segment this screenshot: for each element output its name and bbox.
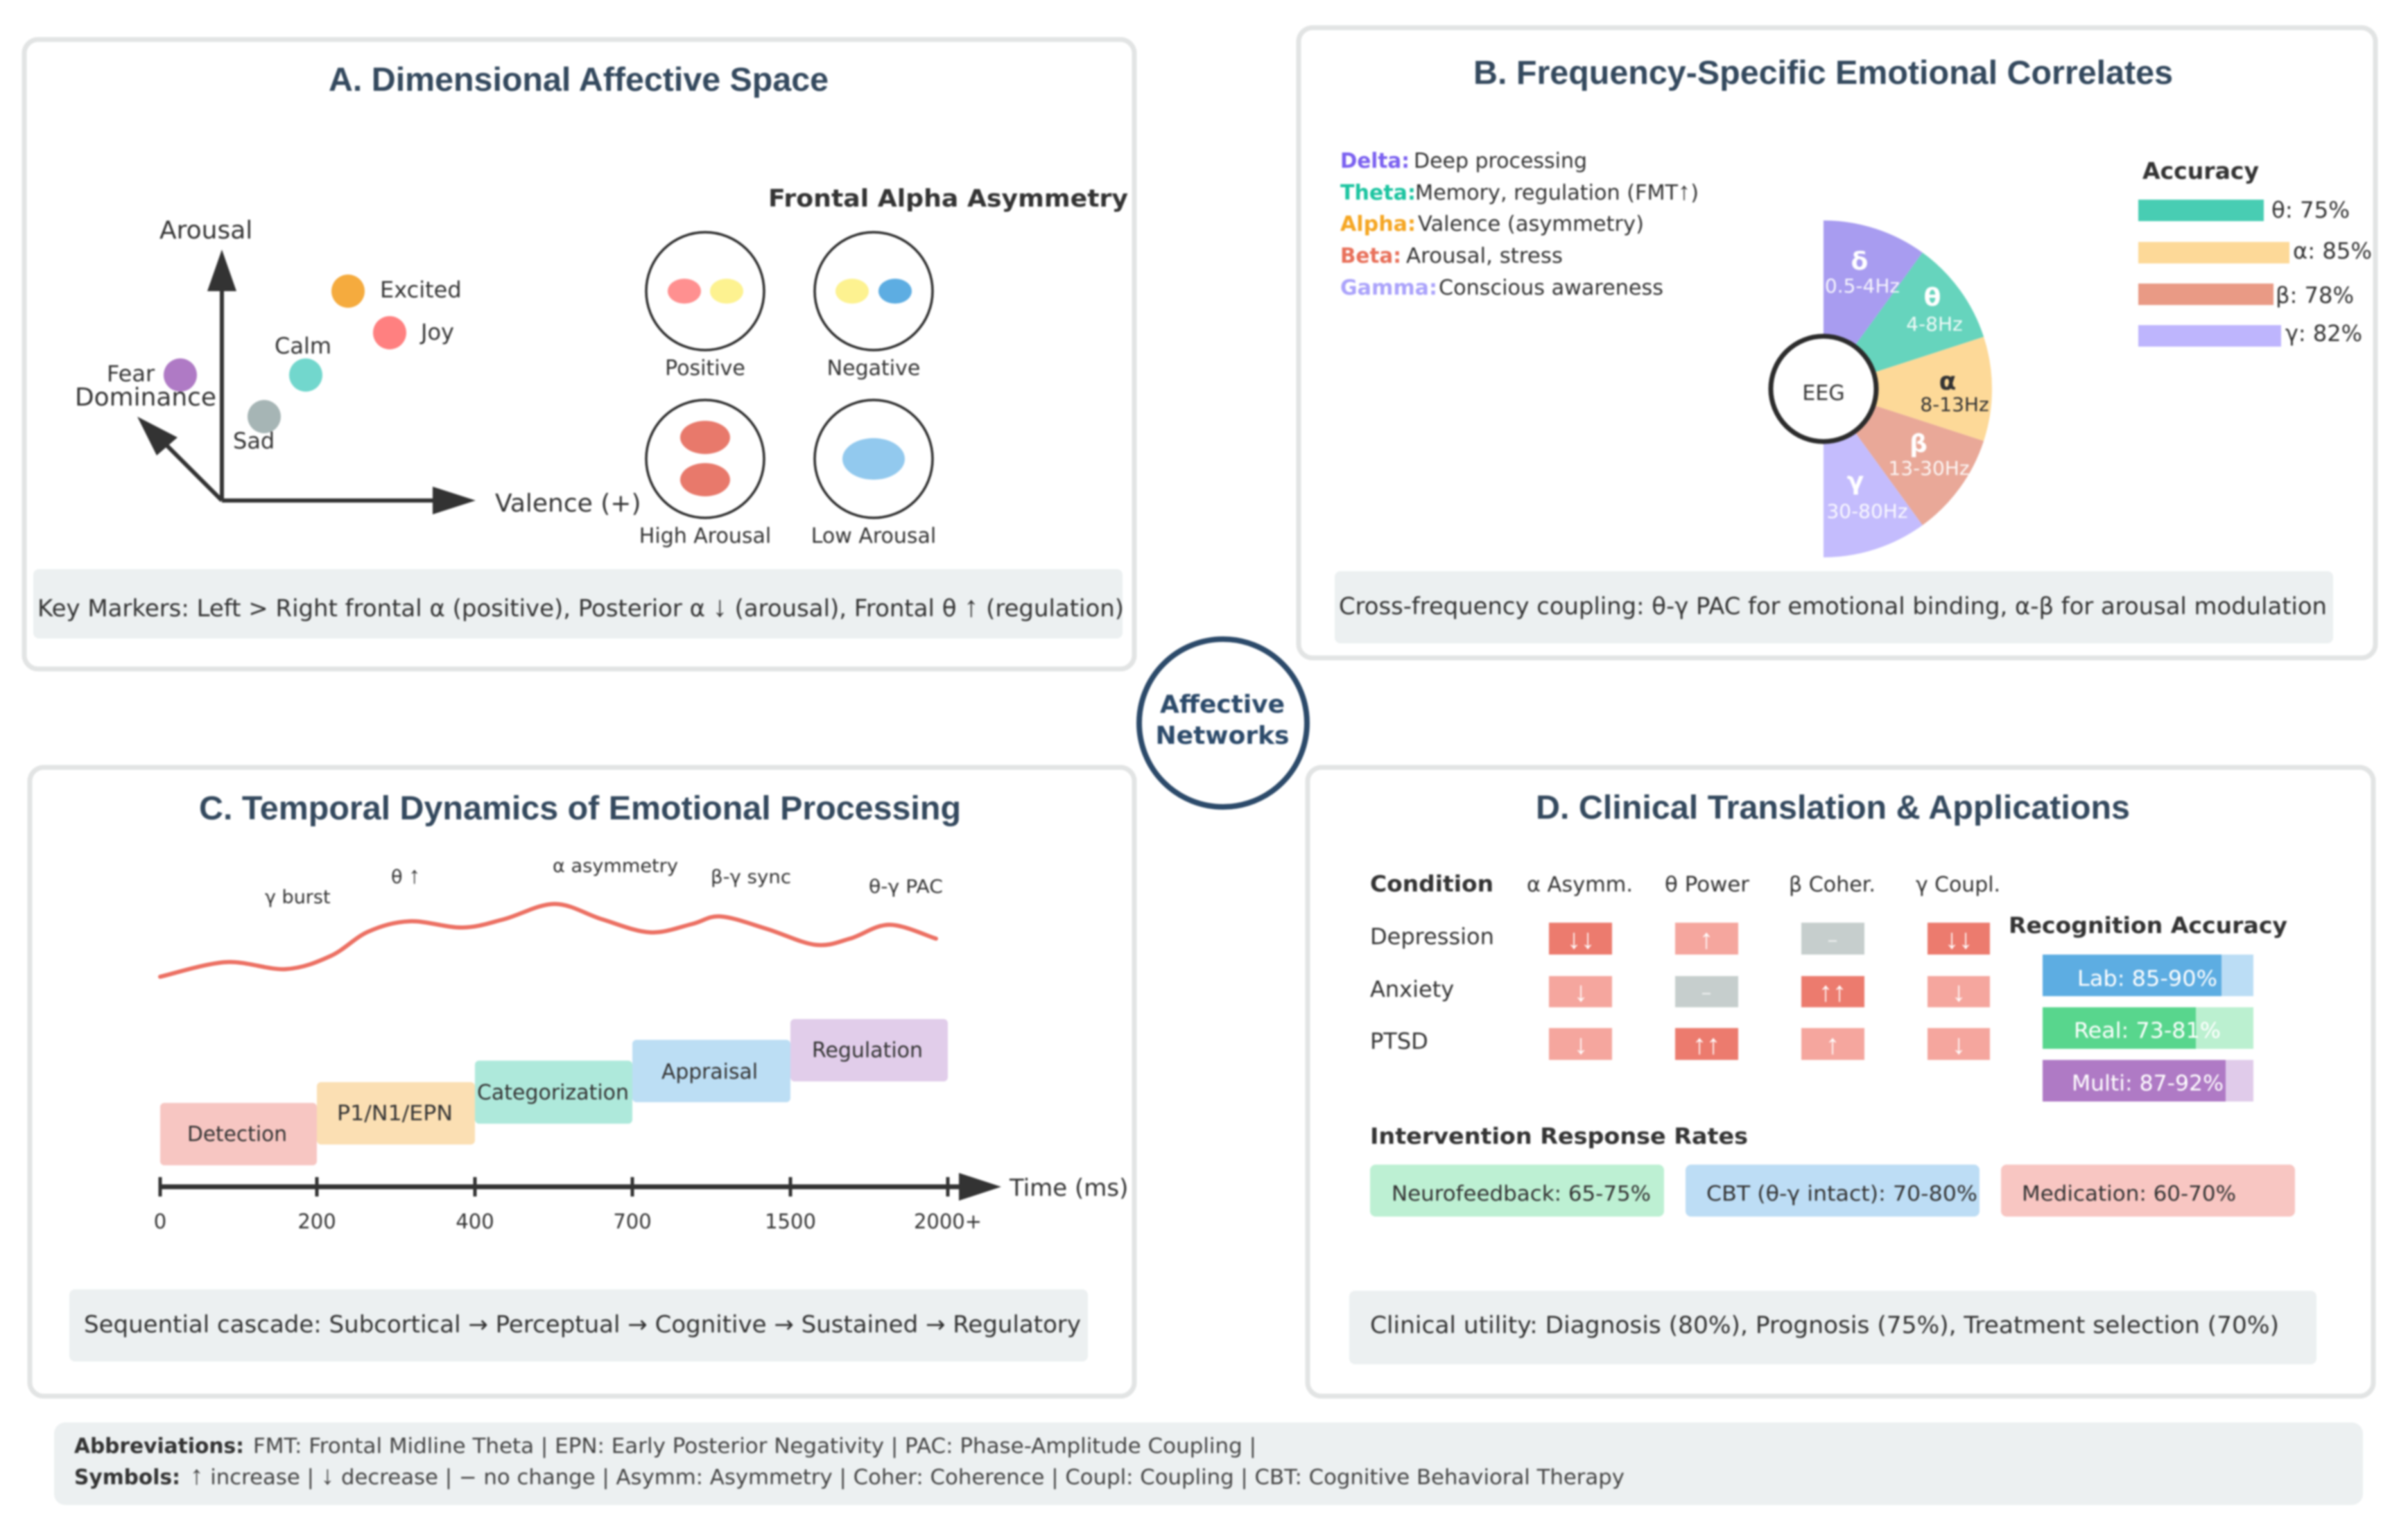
- chart: emotion points: Fear: [107, 360, 155, 387]
- center node: Affective Networks: Networks: [1155, 722, 1290, 750]
- chart: EEG frequency fan: 0.5-4Hz: [1825, 275, 1900, 297]
- chart: time axis: 700: [613, 1210, 652, 1233]
- chart: EEG frequency fan: 30-80Hz: [1826, 500, 1908, 523]
- text block: band legend: Conscious awareness: [1439, 276, 1663, 300]
- chart: emotion points: Sad: [233, 428, 275, 454]
- chart: oscillation wave with labels: θ-γ PAC: [869, 876, 943, 898]
- chart: intervention chips: Medication: 60-70%: [2022, 1182, 2236, 1206]
- table: condition marker matrix: Condition: [1370, 871, 1493, 897]
- chart: oscillation wave with labels: [160, 855, 943, 977]
- heading: panel B title: B. Frequency-Specific Emotional Correlates: [1473, 55, 2173, 92]
- icon: head negative: [815, 232, 933, 381]
- icon: head positive: Positive: [665, 356, 745, 381]
- chart: processing stages: Regulation: [812, 1038, 923, 1063]
- text block: band legend: Delta:: [1340, 149, 1410, 173]
- chart: intervention chips: [1370, 1165, 2295, 1217]
- chart: time axis: 1500: [765, 1210, 816, 1233]
- panel: A. Dimensional Affective Space: [24, 40, 1134, 669]
- icon: head low arousal: Low Arousal: [811, 524, 936, 548]
- chart: oscillation wave with labels: γ burst: [265, 887, 331, 908]
- table: condition marker matrix: ↓↓: [1945, 924, 1973, 955]
- chart: emotion points: Calm: [275, 333, 331, 359]
- chart: time axis: 0: [154, 1210, 166, 1233]
- table: condition marker matrix: ↓↓: [1567, 924, 1595, 955]
- table: condition marker matrix: γ Coupl.: [1916, 873, 2000, 897]
- chart: time axis: 400: [456, 1210, 494, 1233]
- heading: panel D title: D. Clinical Translation & Applications: [1536, 790, 2130, 826]
- table: condition marker matrix: –: [1828, 928, 1837, 952]
- footer: abbreviations and symbols: Symbols:: [74, 1465, 180, 1490]
- callout: sequential cascade: [69, 1289, 1088, 1361]
- table: condition marker matrix: ↑↑: [1819, 977, 1846, 1007]
- table: condition marker matrix: Depression: [1370, 923, 1494, 950]
- chart: accuracy bars: γ: 82%: [2285, 320, 2362, 347]
- heading: Intervention Response Rates: Intervention Response Rates: [1370, 1123, 1748, 1149]
- chart: time axis: 200: [297, 1210, 336, 1233]
- table: condition marker matrix: ↓: [1574, 977, 1588, 1007]
- footer: abbreviations and symbols: Abbreviations:: [74, 1434, 244, 1459]
- icon: head positive: [646, 232, 764, 381]
- chart: EEG frequency fan: α: [1939, 367, 1956, 396]
- icon: head negative: Negative: [827, 356, 920, 381]
- chart: recognition accuracy: [2009, 912, 2287, 1102]
- chart: emotion points: Joy: [419, 319, 454, 345]
- callout: clinical utility: Clinical utility: Diagnosis (80%), Prognosis (75%), Treatment selection (70%): [1370, 1312, 2279, 1339]
- chart: dimensional axes: [75, 216, 641, 518]
- text block: band legend: Arousal, stress: [1406, 244, 1563, 268]
- chart: EEG frequency fan: EEG: [1802, 381, 1845, 406]
- chart: EEG frequency fan: θ: [1924, 284, 1941, 312]
- chart: processing stages: Detection: [187, 1122, 287, 1147]
- text block: band legend: Theta:: [1340, 181, 1416, 205]
- chart: intervention chips: CBT (θ-γ intact): 70-80%: [1706, 1182, 1977, 1206]
- callout: key markers: Key Markers: Left > Right frontal α (positive), Posterior α ↓ (arousal), Frontal θ ↑ (regulation): [37, 590, 1124, 623]
- chart: recognition accuracy: Real: 73-81%: [2074, 1018, 2221, 1043]
- heading: panel A title: A. Dimensional Affective Space: [329, 62, 829, 98]
- icon: head low arousal: [811, 400, 936, 548]
- chart: EEG frequency fan: 13-30Hz: [1888, 457, 1970, 480]
- heading: panel C title: C. Temporal Dynamics of Emotional Processing: [199, 790, 961, 827]
- chart: EEG frequency fan: β: [1909, 430, 1928, 458]
- chart: recognition accuracy: Recognition Accuracy: [2009, 912, 2287, 939]
- text block: band legend: Deep processing: [1414, 149, 1587, 173]
- chart: processing stages: P1/N1/EPN: [337, 1102, 453, 1126]
- text block: band legend: Valence (asymmetry): [1418, 212, 1644, 236]
- chart: accuracy bars: [2138, 157, 2372, 347]
- panel: B. Frequency-Specific Emotional Correlates: [1299, 28, 2375, 658]
- table: condition marker matrix: θ Power: [1665, 873, 1750, 897]
- chart: processing stages: Appraisal: [661, 1060, 758, 1084]
- footer: abbreviations and symbols: [54, 1422, 2363, 1505]
- table: condition marker matrix: ↓: [1574, 1029, 1588, 1060]
- callout: sequential cascade: Sequential cascade: Subcortical → Perceptual → Cognitive → Sustained → Regulatory: [84, 1311, 1081, 1339]
- chart: EEG frequency fan: δ: [1851, 247, 1868, 276]
- chart: oscillation wave with labels: θ ↑: [391, 862, 420, 889]
- callout: cross-frequency coupling: Cross-frequency coupling: θ-γ PAC for emotional binding, α-β for arousal modulation: [1339, 593, 2327, 620]
- chart: accuracy bars: β: 78%: [2276, 282, 2354, 308]
- footer: abbreviations and symbols: FMT: Frontal Midline Theta | EPN: Early Posterior Negativity | PAC: Phase-Amplitude Coupling |: [253, 1434, 1256, 1459]
- chart: oscillation wave with labels: α asymmetry: [553, 855, 678, 877]
- table: condition marker matrix: β Coher.: [1789, 873, 1876, 897]
- table: condition marker matrix: ↑: [1699, 924, 1713, 955]
- chart: dimensional axes: Dominance: [75, 383, 216, 412]
- table: condition marker matrix: ↓: [1952, 1029, 1966, 1060]
- chart: EEG frequency fan: 8-13Hz: [1920, 393, 1989, 416]
- chart: dimensional axes: Arousal: [159, 216, 252, 245]
- chart: accuracy bars: Accuracy: [2142, 157, 2259, 184]
- footer: abbreviations and symbols: ↑ increase | ↓ decrease | − no change | Asymm: Asymmetry | Coher: Coherence | Coupl: Coupling | CBT: Cognitive Behavioral Therapy: [190, 1461, 1625, 1490]
- chart: time axis: 2000+: [914, 1210, 982, 1233]
- icon: head high arousal: High Arousal: [639, 524, 771, 548]
- chart: emotion points: [107, 275, 462, 454]
- table: condition marker matrix: ↑: [1826, 1029, 1839, 1060]
- chart: accuracy bars: θ: 75%: [2271, 197, 2350, 223]
- panel: D. Clinical Translation: [1308, 767, 2373, 1396]
- callout: cross-frequency coupling: [1335, 571, 2333, 643]
- chart: recognition accuracy: Multi: 87-92%: [2072, 1071, 2224, 1096]
- table: condition marker matrix: ↓: [1952, 977, 1966, 1007]
- chart: emotion points: Excited: [380, 277, 462, 303]
- chart: accuracy bars: α: 85%: [2293, 238, 2372, 264]
- table: condition marker matrix: ↑↑: [1692, 1029, 1720, 1060]
- text block: band legend: [1340, 149, 1699, 300]
- icon: head high arousal: [639, 400, 771, 548]
- text block: band legend: Beta:: [1340, 244, 1401, 268]
- heading: Frontal Alpha Asymmetry: Frontal Alpha Asymmetry: [768, 185, 1128, 213]
- table: condition marker matrix: α Asymm.: [1527, 873, 1633, 897]
- chart: time axis: Time (ms): [1009, 1174, 1128, 1202]
- chart: dimensional axes: Valence (+): [495, 489, 641, 518]
- table: condition marker matrix: PTSD: [1370, 1028, 1428, 1054]
- chart: recognition accuracy: Lab: 85-90%: [2077, 966, 2217, 991]
- panel: C. Temporal Dynamics: [30, 767, 1134, 1396]
- callout: key markers: [33, 569, 1124, 638]
- center node: Affective Networks: [1139, 639, 1307, 807]
- text block: band legend: Alpha:: [1340, 212, 1416, 236]
- chart: processing stages: Categorization: [477, 1081, 629, 1105]
- table: condition marker matrix: –: [1701, 981, 1711, 1005]
- chart: intervention chips: Neurofeedback: 65-75%: [1392, 1182, 1651, 1206]
- center node: Affective Networks: Affective: [1160, 690, 1285, 719]
- chart: EEG frequency fan: 4-8Hz: [1906, 313, 1963, 336]
- text block: band legend: Memory, regulation (FMT↑): [1415, 177, 1699, 205]
- chart: EEG frequency fan: γ: [1847, 467, 1864, 496]
- text block: band legend: Gamma:: [1340, 276, 1437, 300]
- chart: time axis: [154, 1173, 1128, 1233]
- table: condition marker matrix: Anxiety: [1370, 976, 1454, 1002]
- chart: processing stages: [160, 1019, 948, 1165]
- chart: oscillation wave with labels: β-γ sync: [711, 867, 791, 888]
- table: condition marker matrix: [1370, 871, 2000, 1060]
- callout: clinical utility: [1349, 1291, 2316, 1364]
- chart: EEG frequency fan: [1771, 220, 1992, 557]
